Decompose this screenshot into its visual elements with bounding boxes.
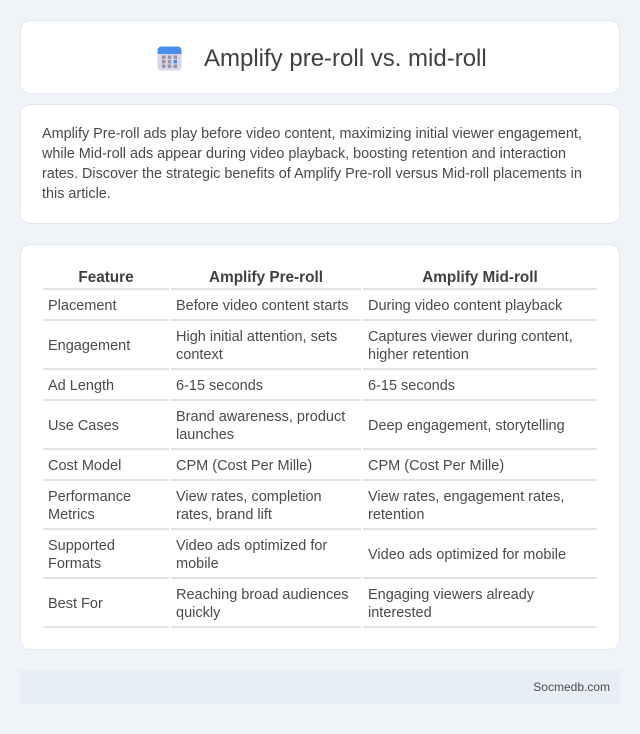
comparison table: launches bbox=[176, 427, 234, 443]
comparison table: Video ads optimized for mobile bbox=[368, 547, 566, 563]
comparison table: View rates, engagement rates, bbox=[368, 489, 564, 505]
row: Performance Metrics: Metrics bbox=[48, 507, 95, 523]
comparison table: rates, brand lift bbox=[176, 507, 272, 523]
column header: Amplify Pre-roll: Amplify Pre-roll bbox=[209, 269, 323, 286]
row: Engagement: Engagement bbox=[48, 338, 130, 354]
row: Supported Formats bbox=[48, 538, 115, 572]
row: Placement: Placement bbox=[48, 298, 117, 314]
footer bar bbox=[20, 670, 620, 704]
title: Amplify pre-roll vs. mid-roll bbox=[204, 45, 487, 72]
panel: introduction bbox=[20, 104, 620, 224]
comparison table: Captures viewer during content, bbox=[368, 329, 573, 345]
comparison table: Before video content starts bbox=[176, 298, 348, 314]
comparison table: 6-15 seconds bbox=[368, 378, 455, 394]
comparison table: interested bbox=[368, 605, 432, 621]
panel: title card bbox=[20, 20, 620, 94]
comparison table: CPM (Cost Per Mille) bbox=[368, 458, 504, 474]
comparison table: Video ads optimized for bbox=[176, 538, 327, 554]
comparison table: Deep engagement, storytelling bbox=[368, 418, 565, 434]
row: Best For: Best For bbox=[48, 596, 103, 612]
comparison table: retention bbox=[368, 507, 424, 523]
comparison table: 6-15 seconds bbox=[176, 378, 263, 394]
intro text: this article. bbox=[42, 186, 111, 202]
row: Ad Length: Ad Length bbox=[48, 378, 114, 394]
comparison table: quickly bbox=[176, 605, 220, 621]
panel: comparison table card bbox=[20, 244, 620, 650]
comparison table: Brand awareness, product bbox=[176, 409, 345, 425]
comparison table: High initial attention, sets bbox=[176, 329, 337, 345]
comparison table: View rates, completion bbox=[176, 489, 322, 505]
comparison table: mobile bbox=[176, 556, 219, 572]
intro text: rates. Discover the strategic benefits of Amplify Pre-roll versus Mid-roll placements in bbox=[42, 166, 582, 182]
comparison table: CPM (Cost Per Mille) bbox=[176, 458, 312, 474]
column header: Feature: Feature bbox=[78, 269, 134, 286]
comparison table: context bbox=[176, 347, 223, 363]
comparison table: Engaging viewers already bbox=[368, 587, 534, 603]
intro text bbox=[42, 126, 582, 202]
row: Supported Formats: Supported bbox=[48, 538, 115, 554]
comparison table: During video content playback bbox=[368, 298, 562, 314]
column header: Amplify Mid-roll: Amplify Mid-roll bbox=[422, 269, 538, 286]
comparison table: Reaching broad audiences bbox=[176, 587, 349, 603]
row: Performance Metrics: Performance bbox=[48, 489, 131, 505]
row: Supported Formats: Formats bbox=[48, 556, 101, 572]
footer credit: Socmedb.com bbox=[533, 680, 610, 694]
row: Performance Metrics bbox=[48, 489, 131, 523]
intro text: while Mid-roll ads appear during video playback, boosting retention and interaction bbox=[42, 146, 566, 162]
intro text: Amplify Pre-roll ads play before video content, maximizing initial viewer engagement, bbox=[42, 126, 582, 142]
row: Cost Model: Cost Model bbox=[48, 458, 121, 474]
icon: calendar bbox=[158, 46, 182, 70]
row: Use Cases: Use Cases bbox=[48, 418, 119, 434]
comparison table: higher retention bbox=[368, 347, 469, 363]
